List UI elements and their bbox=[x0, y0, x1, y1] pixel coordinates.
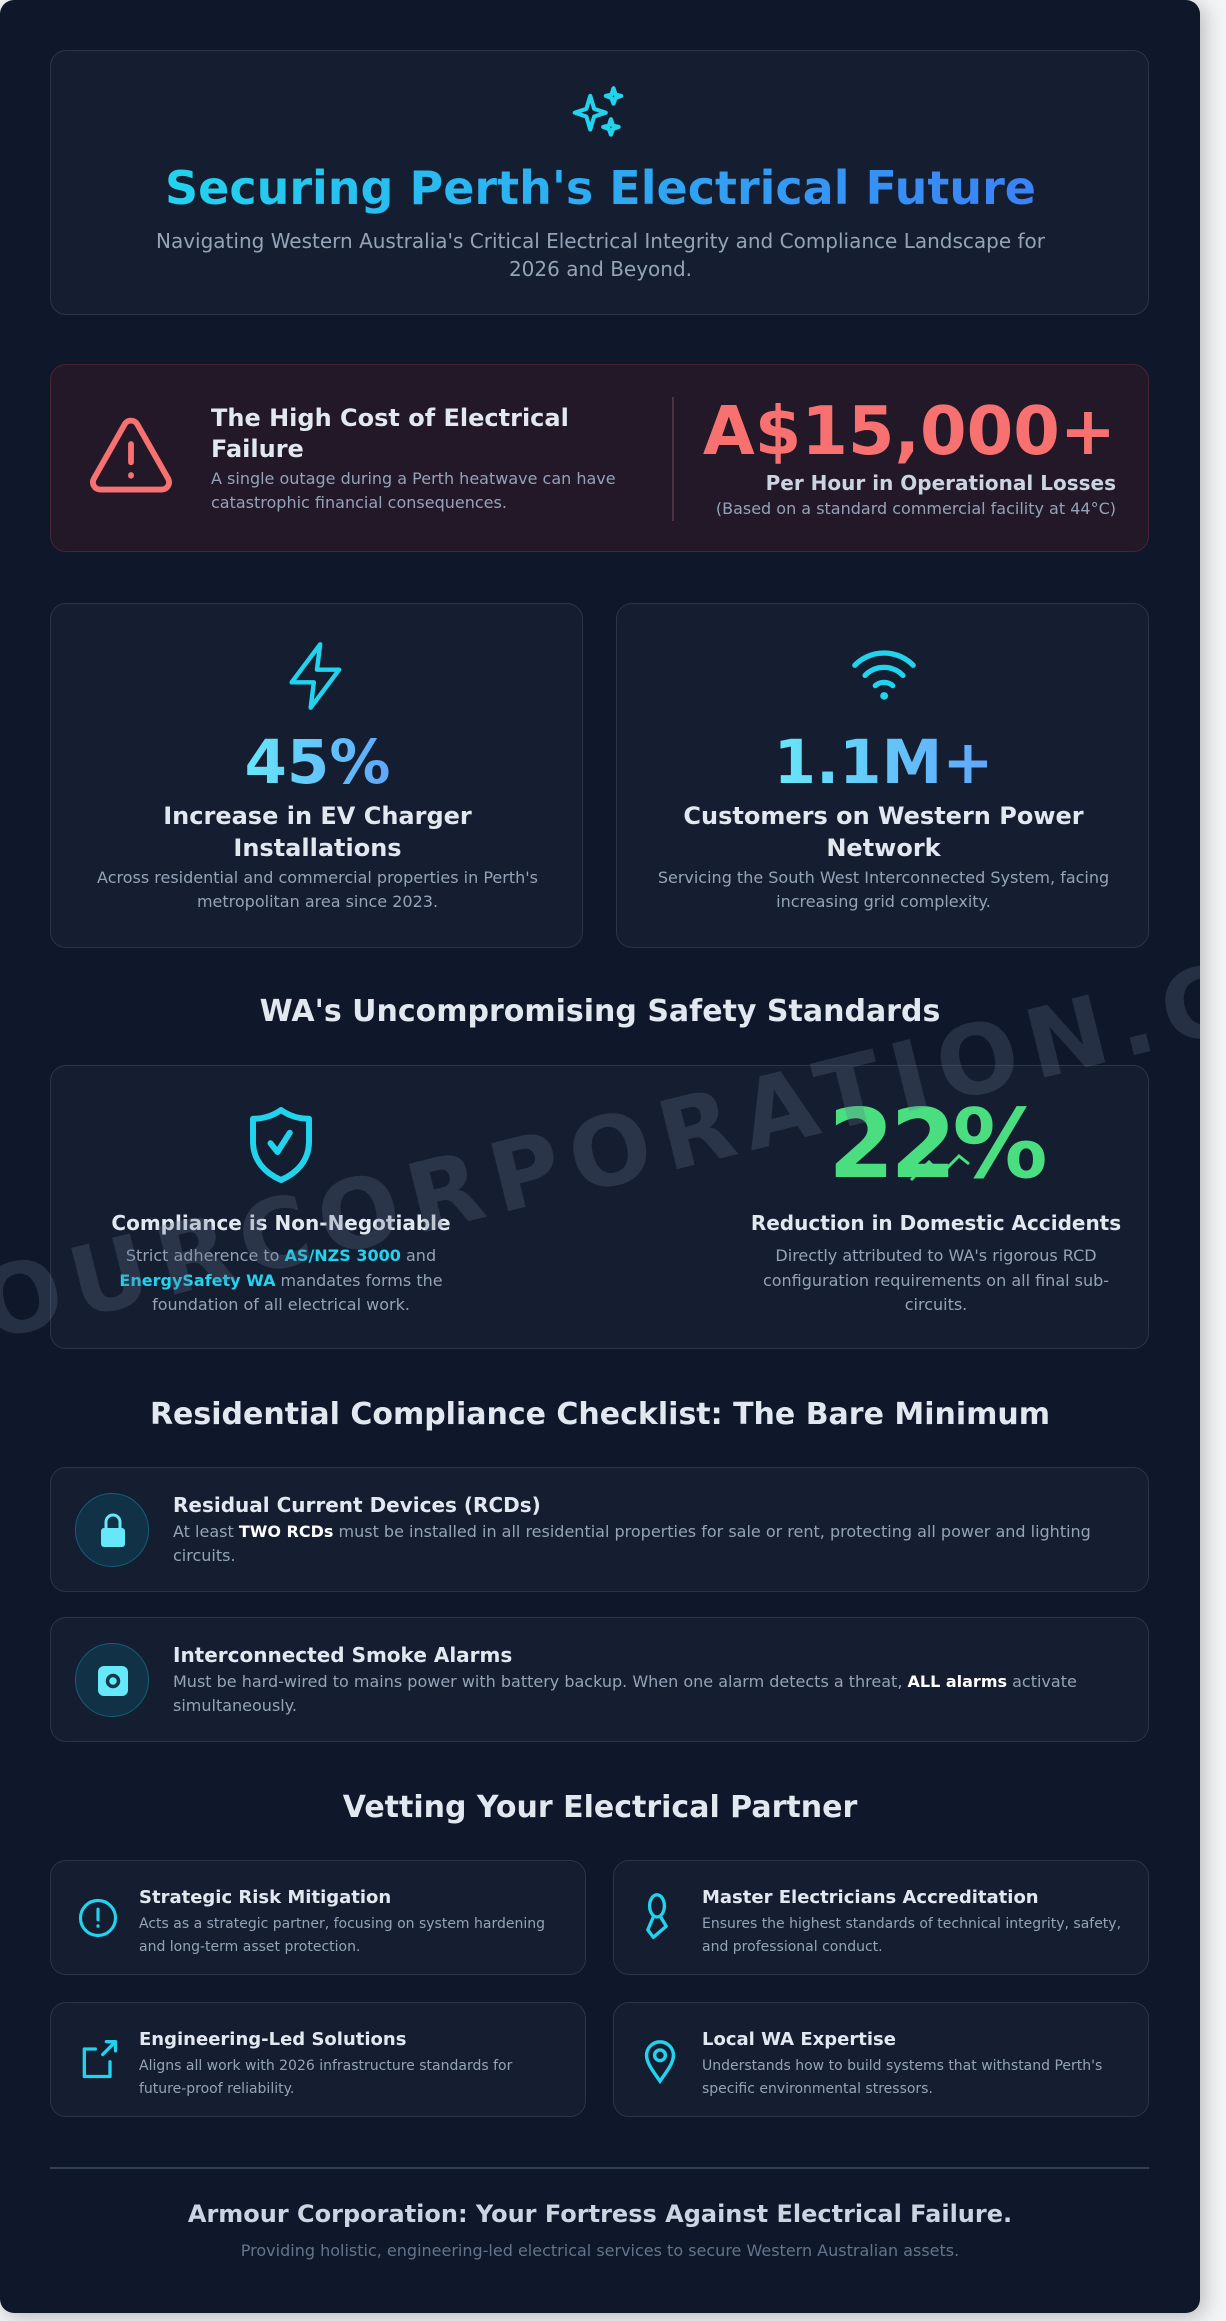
panel: safety standards: Directly attributed to WA's rigorous RCD configuration requirements on all final sub-circuits. bbox=[763, 1246, 1109, 1314]
heading: The High Cost of Electrical Failure bbox=[211, 404, 569, 463]
icon: ribbon bbox=[646, 1893, 668, 1940]
title: Securing Perth's Electrical Future bbox=[165, 161, 1036, 215]
panel: cost of failure: (Based on a standard commercial facility at 44°C) bbox=[716, 499, 1116, 518]
footer subtitle: Providing holistic, engineering-led electrical services to secure Western Australian assets. bbox=[241, 2241, 959, 2260]
icon: lock bbox=[75, 1493, 149, 1567]
text: reduction: Reduction in Domestic Accidents bbox=[751, 1211, 1121, 1235]
footer title: Armour Corporation: Your Fortress Against Electrical Failure. bbox=[188, 2200, 1012, 2228]
card: engineering-led: Aligns all work with 2026 infrastructure standards for future-proof reliability. bbox=[139, 2058, 512, 2097]
heading: vetting: Vetting Your Electrical Partner bbox=[343, 1790, 857, 1825]
card: local expertise: Local WA Expertise bbox=[702, 2029, 896, 2050]
number: 1.1M+ bbox=[774, 727, 993, 798]
card: engineering-led: Engineering-Led Solutions bbox=[139, 2029, 406, 2050]
description: Across residential and commercial properties in Perth's metropolitan area since 2023. bbox=[97, 868, 538, 911]
icon: lightning bbox=[290, 642, 342, 710]
big number: A$15,000+ bbox=[703, 392, 1116, 470]
label: Increase in EV Charger Installations bbox=[163, 802, 472, 862]
item: RCDs bbox=[50, 1467, 1149, 1592]
label: Customers on Western Power Network bbox=[683, 802, 1084, 862]
panel: safety standards bbox=[50, 1065, 1149, 1349]
card: engineering-led bbox=[50, 2002, 586, 2117]
text: Residual Current Devices (RCDs) bbox=[173, 1493, 541, 1517]
card: risk mitigation bbox=[50, 1860, 586, 1975]
card: risk mitigation: Acts as a strategic partner, focusing on system hardening and long-term asset protection. bbox=[139, 1916, 545, 1955]
card: master electricians bbox=[613, 1860, 1149, 1975]
icon: shield check bbox=[250, 1107, 312, 1183]
subtitle: Navigating Western Australia's Critical Electrical Integrity and Compliance Landscape for 2026 and Beyond. bbox=[156, 229, 1045, 281]
icon: external link bbox=[82, 2040, 118, 2078]
number: 45% bbox=[244, 727, 390, 798]
description: A single outage during a Perth heatwave can have catastrophic financial consequences. bbox=[211, 469, 616, 512]
icon: alert circle bbox=[78, 1898, 118, 1938]
card: master electricians: Ensures the highest standards of technical integrity, safety, and professional conduct. bbox=[702, 1916, 1121, 1955]
stat: 22%: 22% bbox=[828, 1090, 1044, 1200]
panel: safety standards: Strict adherence to AS/NZS 3000 and EnergySafety WA mandates forms the foundation of all electrical work. bbox=[119, 1246, 443, 1314]
panel: cost of failure bbox=[50, 364, 1149, 552]
heading: safety standards: WA's Uncompromising Safety Standards bbox=[260, 994, 940, 1029]
icon: alarm bbox=[75, 1643, 149, 1717]
icon: map pin bbox=[644, 2040, 676, 2084]
panel: EV stat bbox=[50, 603, 583, 948]
panel: network stat bbox=[616, 603, 1149, 948]
header panel bbox=[50, 50, 1149, 315]
text: Interconnected Smoke Alarms bbox=[173, 1643, 512, 1667]
icon: warning bbox=[90, 418, 172, 492]
text: compliance: Compliance is Non-Negotiable bbox=[111, 1211, 451, 1235]
item: smoke alarms bbox=[50, 1617, 1149, 1742]
card: local expertise bbox=[613, 2002, 1149, 2117]
card: risk mitigation: Strategic Risk Mitigation bbox=[139, 1887, 391, 1908]
item: smoke alarms: Must be hard-wired to mains power with battery backup. When one alarm detects a threat, ALL alarms activate simultaneously. bbox=[173, 1672, 1077, 1715]
icon: wifi bbox=[852, 650, 916, 700]
heading: checklist: Residential Compliance Checklist: The Bare Minimum bbox=[150, 1397, 1050, 1432]
item: RCDs: At least TWO RCDs must be installed in all residential properties for sale or rent, protecting all power and lighting circuits. bbox=[173, 1522, 1091, 1565]
caption: Per Hour in Operational Losses bbox=[766, 471, 1116, 495]
icon: sparkles bbox=[572, 86, 624, 137]
card: master electricians: Master Electricians Accreditation bbox=[702, 1887, 1039, 1908]
icon: trend line bbox=[910, 1154, 970, 1181]
description: Servicing the South West Interconnected System, facing increasing grid complexity. bbox=[658, 868, 1109, 911]
card: local expertise: Understands how to build systems that withstand Perth's specific environmental stressors. bbox=[702, 2058, 1102, 2097]
